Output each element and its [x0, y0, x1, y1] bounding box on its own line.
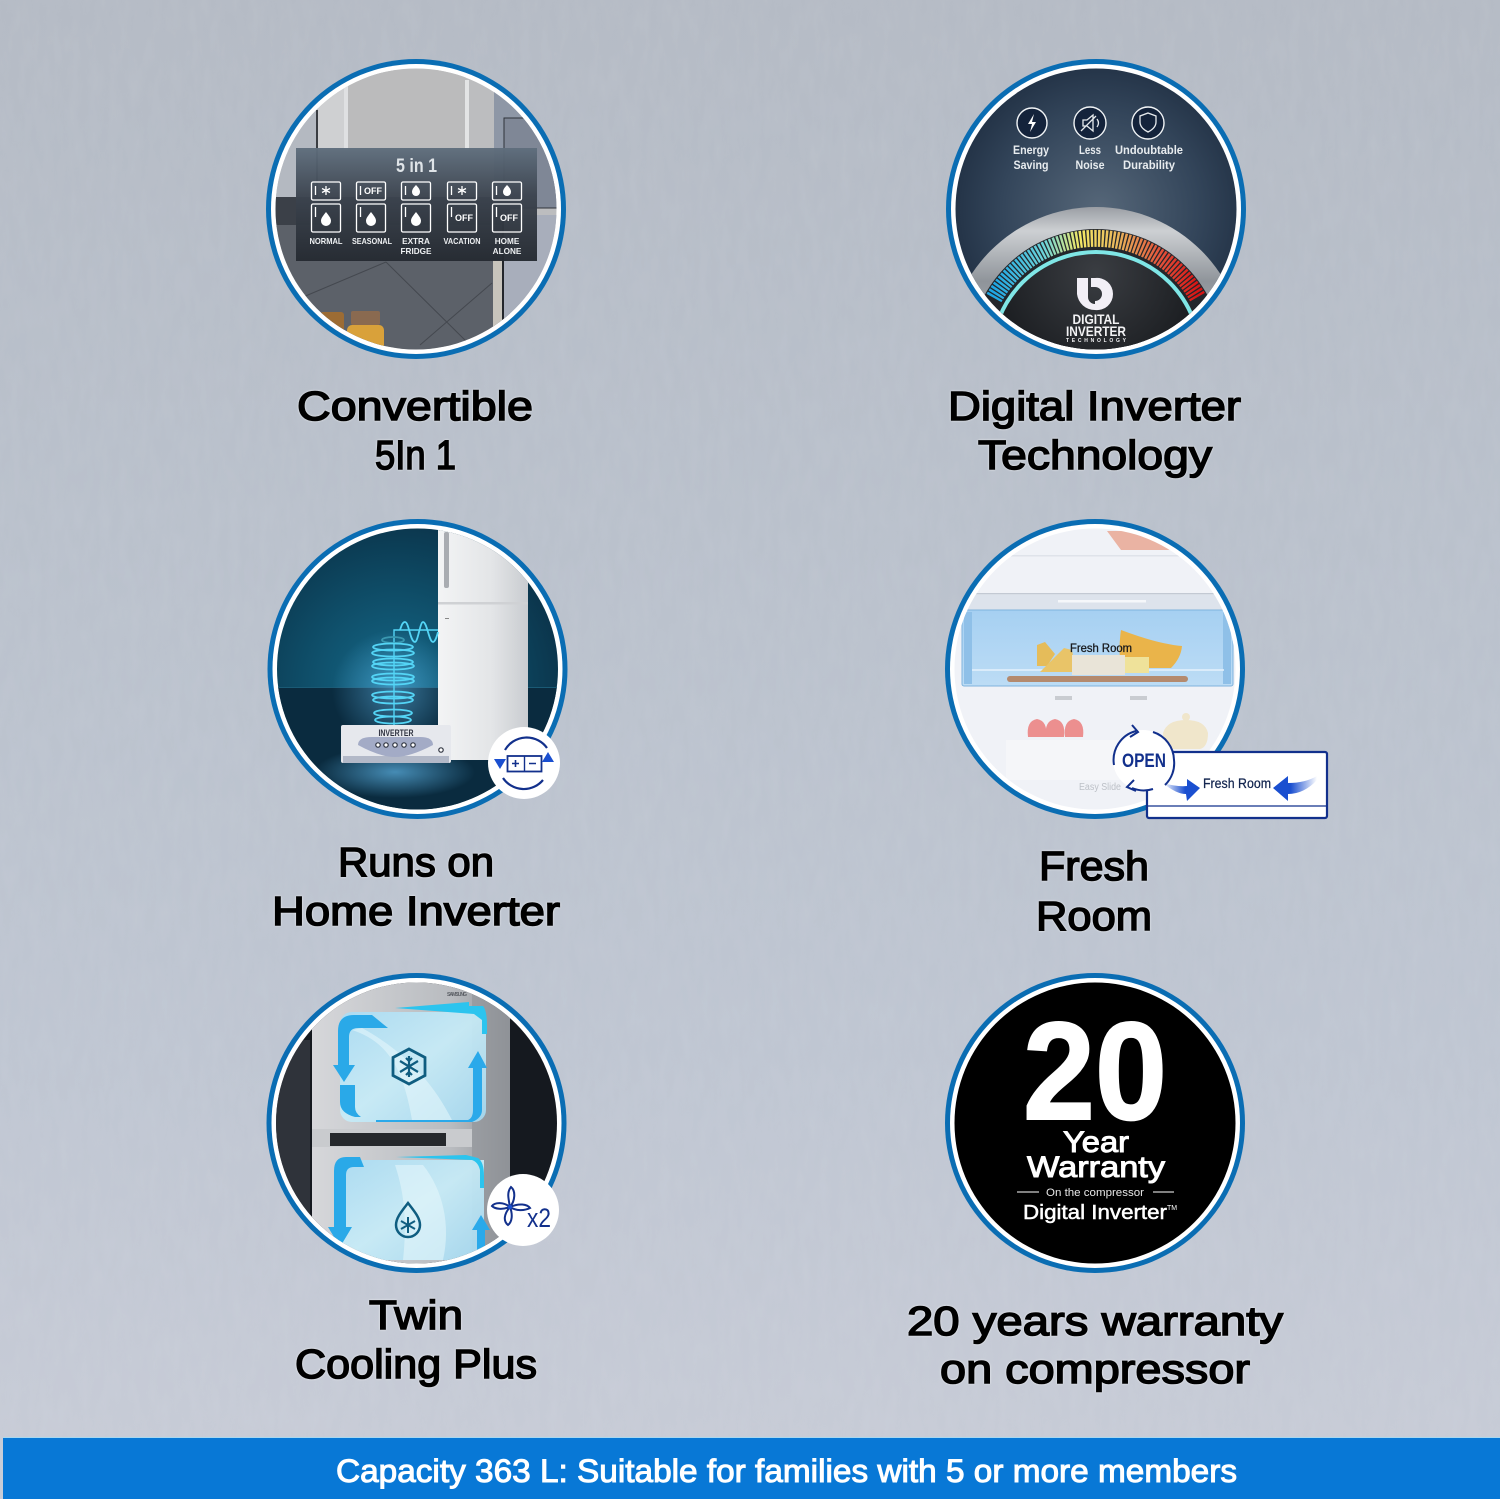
gauge: led arc: [994, 238, 1198, 298]
heading: twin cooling plus: [295, 1292, 537, 1387]
fridge: [438, 515, 528, 760]
panel: 20 year warranty: [945, 973, 1245, 1273]
icon: jar: [1163, 713, 1208, 749]
logo: digital inverter: [1066, 278, 1127, 344]
heading: fresh room: Fresh: [1039, 843, 1149, 889]
fridge body: SAMSUNG: [447, 992, 467, 998]
heading: runs on home inverter: [272, 839, 560, 934]
heading: 20 years warranty: on compressor: [940, 1346, 1250, 1392]
info panel: 5 modes: SEASONAL: [352, 237, 392, 246]
panel: 20 year warranty: Warranty: [1027, 1151, 1165, 1184]
heading: convertible: Convertible: [297, 383, 533, 429]
info panel: 5 modes: NORMAL: [310, 237, 342, 246]
fresh room drawer: [962, 610, 1233, 686]
heading: 20 years warranty: [907, 1298, 1284, 1392]
info panel: 5 modes: [296, 148, 537, 261]
upper cooling zone: [333, 1002, 487, 1122]
panel: fresh room: Easy Slide: [1079, 782, 1121, 793]
icon: strawberries: [1028, 719, 1083, 737]
icon: snowflake hexagon: [393, 1049, 425, 1084]
logo: digital inverter: DIGITAL: [1072, 311, 1120, 327]
heading: convertible: 5In 1: [375, 432, 456, 478]
heading: digital inverter: Digital Inverter: [948, 383, 1241, 429]
icon badge: battery cycle: [488, 727, 560, 799]
info panel: 5 modes: 5 in 1: [396, 156, 437, 177]
info panel: 5 modes: ALONE: [493, 247, 522, 256]
panel: 20 year warranty: 20: [1023, 994, 1167, 1149]
icon row: energy, noise, durability: Undoubtable: [1115, 143, 1183, 157]
icon row: energy, noise, durability: Durability: [1123, 158, 1175, 172]
panel: runs on home inverter: [268, 515, 570, 822]
info panel: 5 modes: VACATION: [444, 237, 481, 246]
info panel: 5 modes: OFF: [500, 213, 518, 223]
info panel: 5 modes: HOME: [495, 237, 520, 246]
logo: digital inverter: TECHNOLOGY: [1066, 338, 1127, 344]
info panel: 5 modes: EXTRA: [402, 237, 430, 246]
panel: twin cooling plus: [266, 973, 570, 1280]
info panel: 5 modes: OFF: [364, 186, 382, 196]
logo: digital inverter: INVERTER: [1066, 323, 1126, 339]
icon badge: twin fans x2: x2: [527, 1203, 551, 1233]
info panel: 5 modes: OFF: [455, 213, 473, 223]
heading: runs on home inverter: Runs on: [338, 839, 494, 885]
panel: digital inverter technology: [946, 59, 1246, 359]
callout: open fresh room: [1113, 725, 1327, 818]
icon: water drop: [396, 1203, 420, 1237]
heading: twin cooling plus: Cooling Plus: [295, 1341, 537, 1387]
icon row: energy, noise, durability: [1013, 107, 1183, 172]
icon row: energy, noise, durability: Energy: [1013, 143, 1049, 157]
footer banner: Capacity 363 L: Suitable for families with 5 or more members: [336, 1453, 1237, 1489]
fresh room drawer: Fresh Room: [1070, 641, 1132, 655]
panel: 20 year warranty: TM: [1167, 1205, 1177, 1212]
heading: fresh room: [1036, 843, 1152, 939]
panel: 20 year warranty: On the compressor: [1046, 1187, 1144, 1199]
wave: inverter to fridge: [372, 622, 438, 725]
panel: fresh room: [945, 519, 1327, 820]
panel: 20 year warranty: Year: [1063, 1126, 1129, 1159]
panel: convertible 5 in 1: [266, 59, 574, 360]
heading: digital inverter: Technology: [978, 432, 1213, 478]
icon row: energy, noise, durability: Less: [1079, 143, 1101, 157]
inverter box: [341, 725, 451, 763]
icon badge: twin fans x2: [487, 1174, 559, 1246]
lower cooling zone: [328, 1155, 490, 1260]
inverter box: INVERTER: [378, 728, 414, 738]
heading: twin cooling plus: Twin: [369, 1292, 463, 1338]
panel: 20 year warranty: Digital Inverter: [1023, 1202, 1167, 1224]
heading: 20 years warranty: 20 years warranty: [907, 1298, 1284, 1344]
icon row: energy, noise, durability: Saving: [1014, 158, 1048, 172]
icon: spice jars: [321, 311, 384, 346]
icon row: energy, noise, durability: Noise: [1076, 158, 1105, 172]
callout: open fresh room: OPEN: [1122, 751, 1166, 772]
heading: fresh room: Room: [1036, 893, 1152, 939]
heading: convertible: [297, 383, 533, 478]
info panel: 5 modes: FRIDGE: [401, 247, 432, 256]
fridge body: [312, 980, 510, 1280]
heading: digital inverter: [948, 383, 1241, 478]
heading: runs on home inverter: Home Inverter: [272, 888, 560, 934]
footer banner: [3, 1437, 1500, 1499]
callout: open fresh room: Fresh Room: [1203, 775, 1271, 791]
